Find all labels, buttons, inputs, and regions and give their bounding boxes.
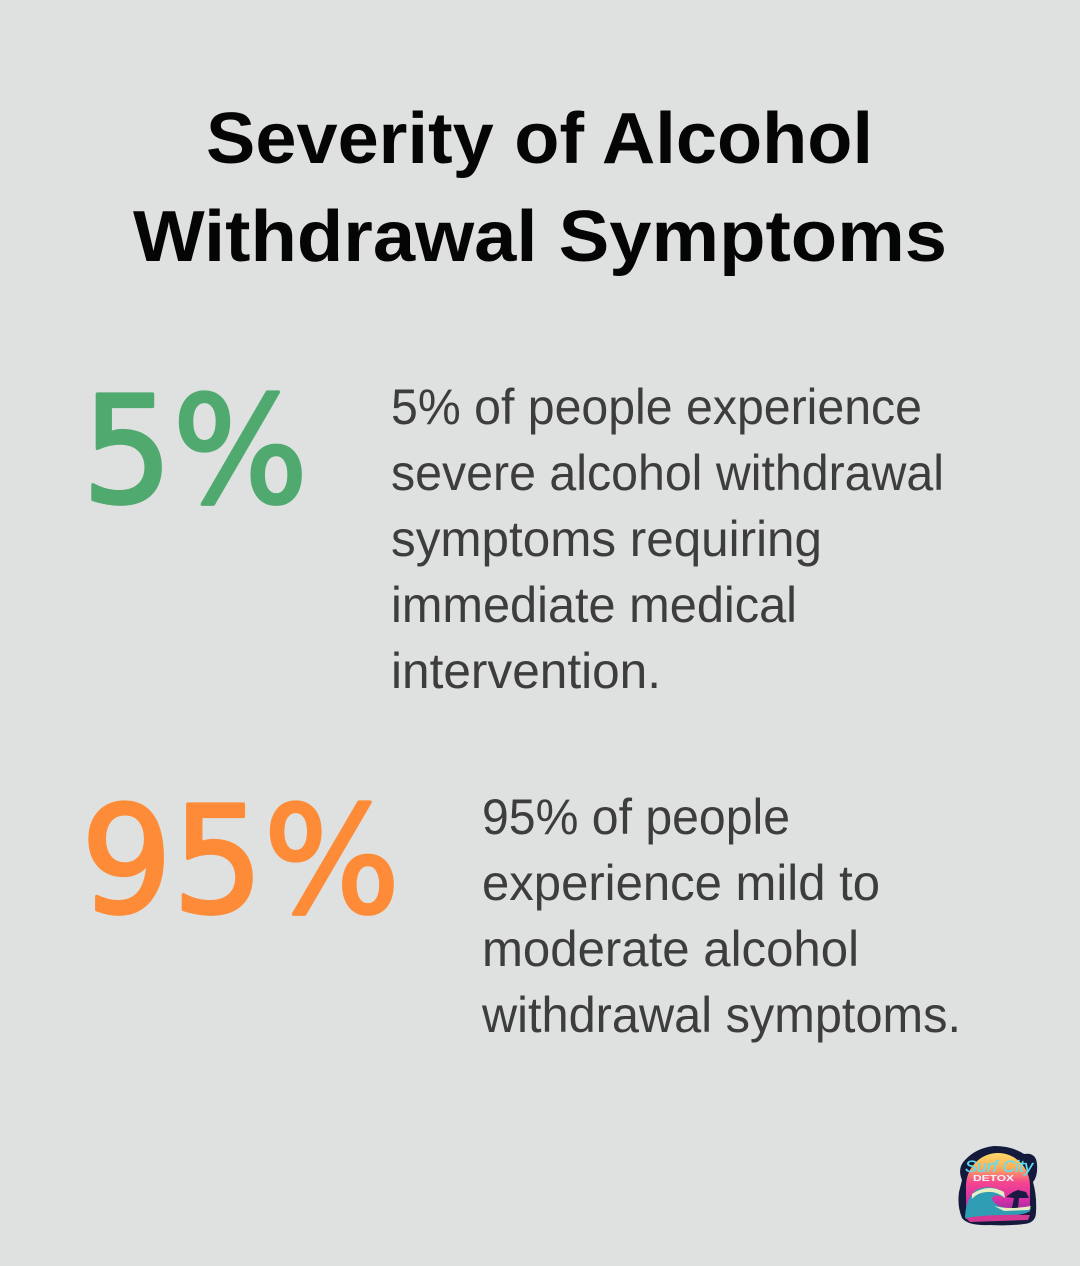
description: 95% mild to moderate symptoms: withdrawal symptoms. xyxy=(481,986,961,1043)
logo wave foam xyxy=(972,1188,1031,1211)
title: Withdrawal Symptoms xyxy=(133,197,947,277)
description: 95% mild to moderate symptoms xyxy=(481,788,961,1043)
statistic: 95%: 95% xyxy=(81,775,400,947)
title xyxy=(133,99,947,277)
description: 5% severe symptoms: immediate medical xyxy=(391,576,797,633)
description: 5% severe symptoms: symptoms requiring xyxy=(391,510,822,567)
logo surf stripe xyxy=(966,1215,1030,1222)
logo wave xyxy=(965,1187,1031,1219)
description: 95% mild to moderate symptoms: 95% of people xyxy=(482,788,790,845)
description: 95% mild to moderate symptoms: experience mild to xyxy=(482,854,880,911)
logo sunset xyxy=(966,1153,1030,1212)
description: 5% severe symptoms: severe alcohol withdrawal xyxy=(391,444,944,501)
description: 95% mild to moderate symptoms: moderate alcohol xyxy=(482,920,859,977)
title: Severity of Alcohol xyxy=(206,99,873,179)
icon: Surf City Detox logo xyxy=(958,1146,1037,1225)
logo script lettering: Surf City xyxy=(965,1157,1035,1176)
logo badge backing xyxy=(958,1146,1037,1225)
statistic: 5%: 5% xyxy=(82,365,308,537)
logo detox lettering: DETOX xyxy=(973,1173,1014,1183)
description: 5% severe symptoms: intervention. xyxy=(391,642,661,699)
logo palm xyxy=(1006,1190,1029,1208)
description: 5% severe symptoms: 5% of people experience xyxy=(391,378,922,435)
description: 5% severe symptoms xyxy=(391,378,944,699)
